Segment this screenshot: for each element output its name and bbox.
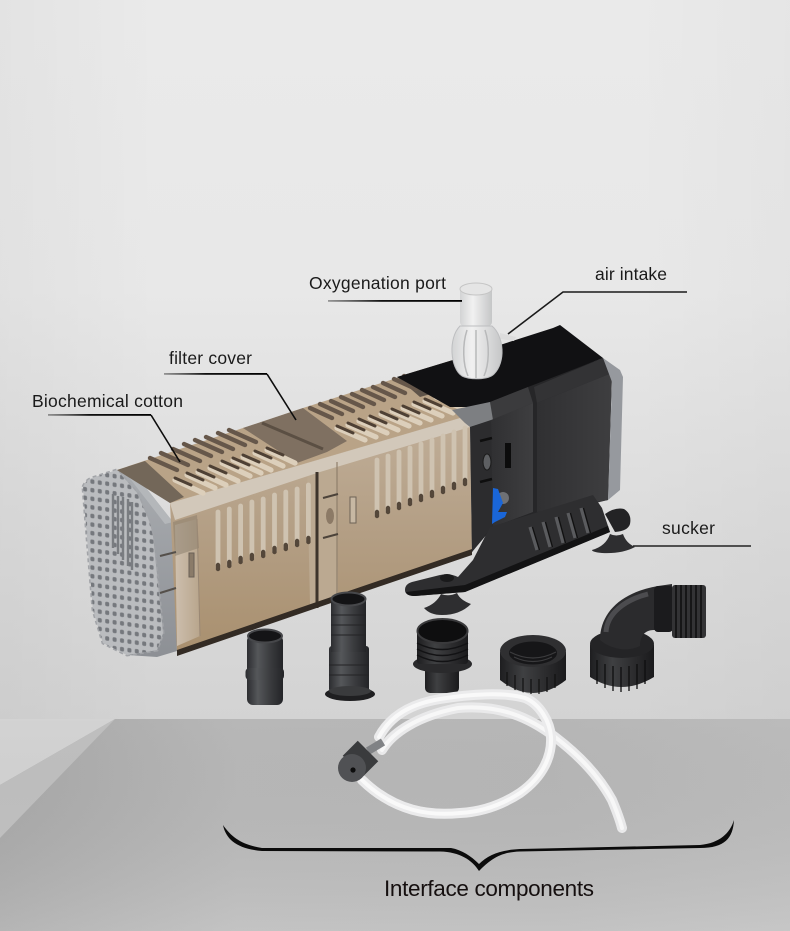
tan body top face — [117, 360, 470, 503]
fittings — [246, 584, 706, 705]
black motor housing — [397, 325, 623, 552]
fitting 2: stepped coupler — [325, 592, 375, 701]
stand with suckers — [405, 495, 635, 615]
left sucker — [424, 593, 471, 615]
stand bracket — [405, 495, 630, 596]
blue clip valve — [492, 488, 509, 524]
label: sucker — [633, 518, 751, 546]
label: air intake — [508, 264, 687, 334]
tan body clips — [160, 494, 356, 593]
background wall — [0, 0, 790, 720]
nozzle — [338, 742, 383, 782]
silicone air hose with nozzle — [338, 694, 622, 828]
label: Biochemical cotton — [32, 391, 183, 462]
label: Biochemical cotton: Biochemical cotton — [32, 391, 183, 411]
oxygenation port — [452, 283, 516, 379]
label: air intake: air intake — [595, 264, 667, 284]
label: filter cover: filter cover — [169, 348, 252, 368]
front vertical slots — [218, 428, 465, 569]
top face slots — [150, 376, 471, 493]
fitting 5: elbow with nut — [590, 584, 706, 692]
hose — [362, 694, 622, 828]
label: Oxygenation port: Oxygenation port — [309, 273, 446, 293]
label: filter cover — [164, 348, 296, 420]
pump assembly — [80, 283, 635, 658]
fitting 4: threaded nut — [500, 635, 566, 694]
bracket: interface components — [223, 820, 734, 871]
right sucker — [592, 534, 635, 553]
label: Interface components: Interface components — [384, 876, 594, 901]
grey end cap — [80, 468, 177, 658]
fitting 1: short coupler — [246, 630, 284, 705]
tan body front — [170, 418, 472, 656]
label: sucker: sucker — [662, 518, 715, 538]
fitting 3: threaded adapter — [413, 619, 472, 693]
floor — [0, 719, 790, 931]
